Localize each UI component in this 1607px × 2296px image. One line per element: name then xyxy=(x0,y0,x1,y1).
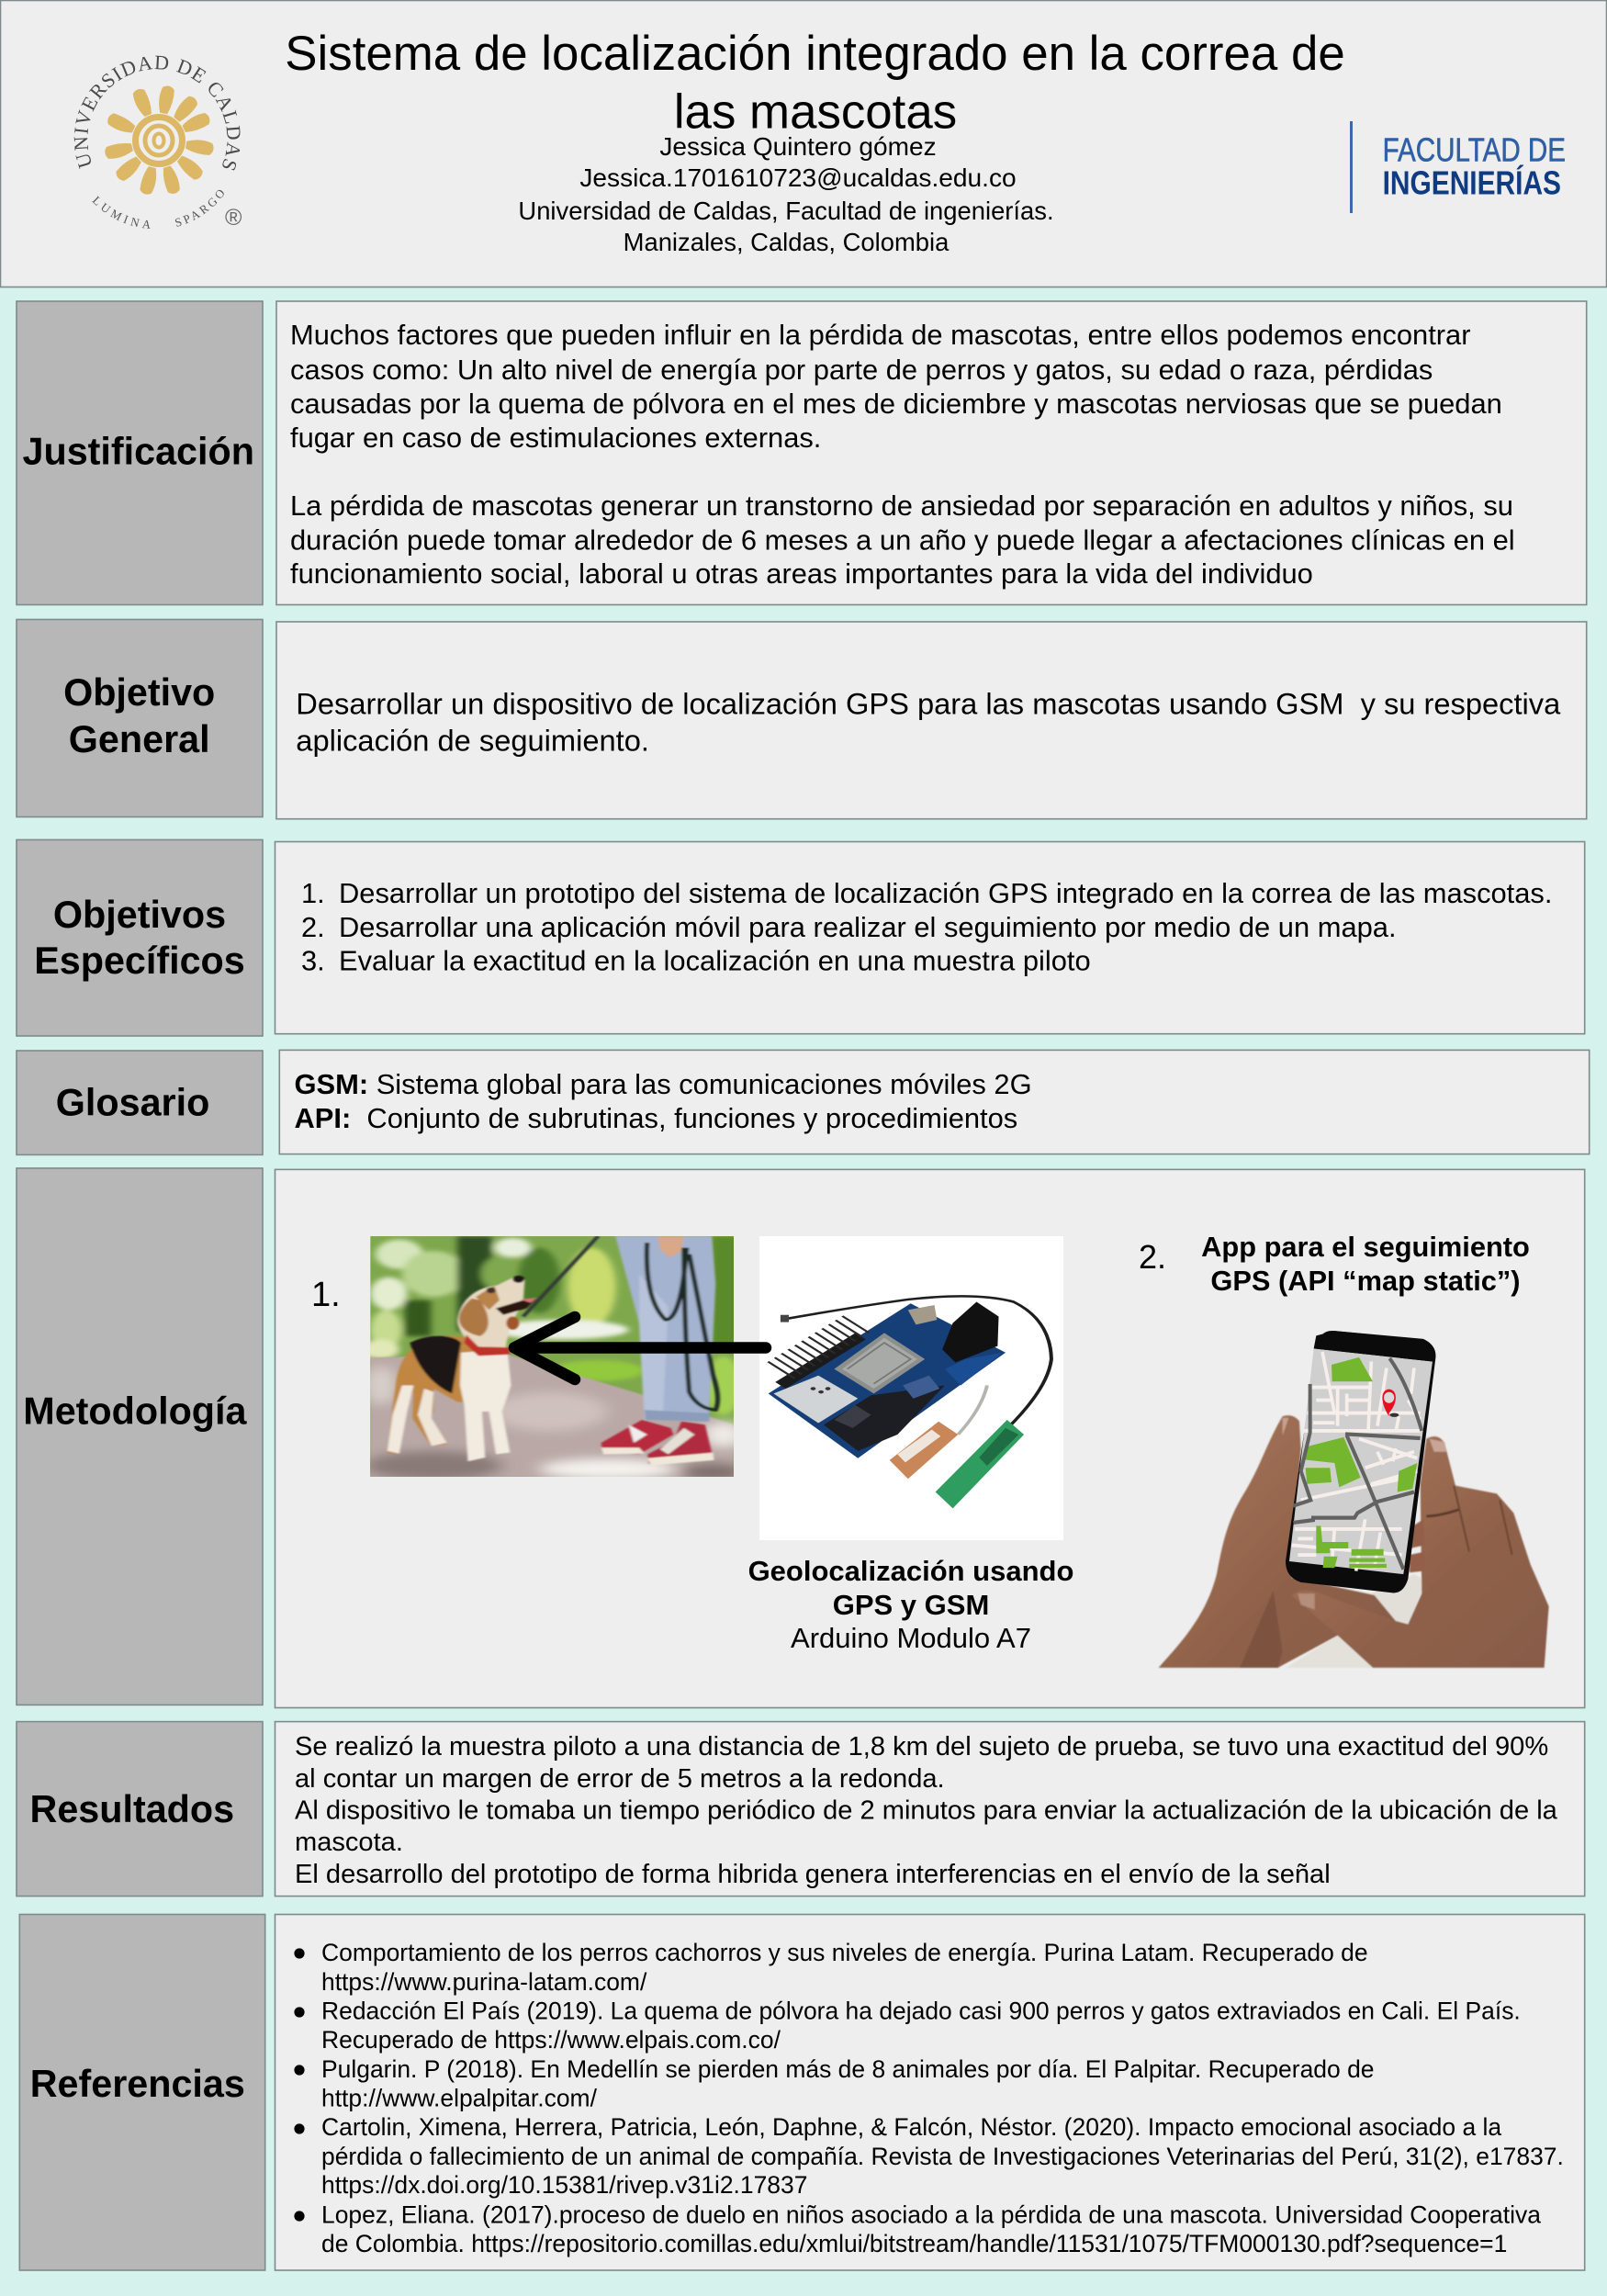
logo: Universidad de Caldas: SPARGO xyxy=(174,189,224,227)
panel: Resultados xyxy=(17,1722,1585,1896)
heading: Objetivos Específicos: Específicos xyxy=(34,940,245,982)
text box: justificación: causadas por la quema de pólvora en el mes de diciembre y mascotas nerviosas que se puedan xyxy=(290,388,1502,420)
author block: Universidad de Caldas, Facultad de ingenierías. xyxy=(518,197,1054,225)
reference list: https://www.purina-latam.com/ xyxy=(321,1968,647,1996)
glossary definitions: GSM: Sistema global para las comunicaciones móviles 2G xyxy=(294,1068,1032,1100)
glossary definitions xyxy=(279,1050,1590,1154)
logo: Facultad de Ingenierías: FACULTAD DE xyxy=(1383,131,1566,169)
list: objetivos específicos: 3. xyxy=(301,945,325,977)
list: objetivos específicos: 1. xyxy=(301,877,325,909)
text box: justificación xyxy=(276,301,1587,604)
step number 1: 1. xyxy=(311,1276,341,1314)
caption: Geolocalización xyxy=(748,1555,1073,1654)
logo: Universidad de Caldas: ® xyxy=(225,205,242,231)
heading: Objetivo General: Objetivo xyxy=(63,671,215,714)
author block xyxy=(518,132,1054,256)
text box: justificación: fugar en caso de estimulaciones externas. xyxy=(290,422,821,454)
heading: Objetivos Específicos: Objetivos xyxy=(53,894,226,936)
title xyxy=(285,27,1345,140)
text box: resultados: El desarrollo del prototipo de forma hibrida genera interferencias en el envío de la señal xyxy=(295,1860,1331,1889)
reference list: Cartolin, Ximena, Herrera, Patricia, León, Daphne, & Falcón, Néstor. (2020). Impacto emocional asociado a la xyxy=(321,2113,1501,2141)
caption: App: GPS (API “map static”) xyxy=(1210,1265,1521,1297)
photo: beagle on leash xyxy=(363,1236,745,1481)
text box: justificación: casos como: Un alto nivel de energía por parte de perros y gatos, su edad o raza, pérdidas xyxy=(290,354,1433,386)
heading: Objetivo General xyxy=(63,671,215,760)
arrow: module to collar xyxy=(514,1317,766,1379)
caption: App: App para el seguimiento xyxy=(1201,1231,1530,1263)
logo: Universidad de Caldas: LUMINA xyxy=(92,196,151,229)
author block: Jessica.1701610723@ucaldas.edu.co xyxy=(579,163,1017,192)
image: hands holding phone with map xyxy=(1159,1331,1549,1668)
list: objetivos específicos: Desarrollar un prototipo del sistema de localización GPS integrado en la correa de las mascotas. xyxy=(339,877,1552,909)
panel: Metodología xyxy=(17,1168,1585,1708)
reference list: Recuperado de https://www.elpais.com.co/ xyxy=(321,2026,781,2054)
heading: Objetivo General: General xyxy=(69,718,210,760)
text box: resultados: Al dispositivo le tomaba un tiempo periódico de 2 minutos para enviar la actualización de la ubicación de la xyxy=(295,1796,1558,1826)
heading: Objetivos Específicos xyxy=(34,894,245,982)
heading: Metodología: Metodología xyxy=(23,1390,247,1433)
author block: Manizales, Caldas, Colombia xyxy=(624,228,950,256)
reference list: Lopez, Eliana. (2017).proceso de duelo en niños asociado a la pérdida de una mascota. Universidad Cooperativa xyxy=(321,2201,1541,2229)
text box: justificación: La pérdida de mascotas generar un transtorno de ansiedad por separación en adultos y niños, su xyxy=(290,490,1513,522)
title: las mascotas xyxy=(674,84,957,140)
heading: Glosario: Glosario xyxy=(56,1082,209,1124)
list: objetivos específicos xyxy=(275,841,1585,1034)
glossary definitions: API: Conjunto de subrutinas, funciones y procedimientos xyxy=(294,1102,1017,1134)
photo: Arduino A7 GPS/GSM module xyxy=(759,1236,1063,1540)
text box: objetivo general: aplicación de seguimiento. xyxy=(296,724,649,757)
reference list xyxy=(275,1914,1585,2270)
header banner xyxy=(0,0,1607,288)
panel: Objetivo General xyxy=(17,619,1587,819)
title: Sistema de localización integrado en la correa de xyxy=(285,27,1345,81)
panel: Glosario xyxy=(17,1050,1590,1154)
author block: Jessica Quintero gómez xyxy=(659,132,937,161)
reference list: de Colombia. https://repositorio.comillas.edu/xmlui/bitstream/handle/11531/1075/TFM000130.pdf?sequence=1 xyxy=(321,2230,1507,2257)
reference list: Comportamiento de los perros cachorros y sus niveles de energía. Purina Latam. Recuperado de xyxy=(321,1939,1368,1966)
heading: Resultados: Resultados xyxy=(29,1788,234,1830)
text box: justificación: Muchos factores que pueden influir en la pérdida de mascotas, entre ellos podemos encontrar xyxy=(290,319,1471,351)
caption: Geolocalización: GPS y GSM xyxy=(833,1589,989,1621)
text box: objetivo general xyxy=(276,622,1587,819)
text box: justificación: funcionamiento social, laboral u otras areas importantes para la vida del individuo xyxy=(290,557,1313,590)
logo: Universidad de Caldas: UNIVERSIDAD DE CALDAS xyxy=(73,55,241,171)
reference list: http://www.elpalpitar.com/ xyxy=(321,2085,598,2112)
text box: objetivo general: Desarrollar un dispositivo de localización GPS para las mascotas usando GSM y su respectiva xyxy=(296,687,1561,721)
text box: resultados: Se realizó la muestra piloto a una distancia de 1,8 km del sujeto de prueba, se tuvo una exactitud del 90% xyxy=(295,1732,1548,1761)
caption: Geolocalización: Arduino Modulo A7 xyxy=(791,1622,1031,1654)
text box: justificación: duración puede tomar alrededor de 6 meses a un año y puede llegar a afectaciones clínicas en el xyxy=(290,523,1515,557)
text box: resultados: mascota. xyxy=(295,1828,403,1857)
logo: Universidad de Caldas xyxy=(73,55,242,231)
reference list: pérdida o fallecimiento de un animal de compañía. Revista de Investigaciones Veterinarias del Perú, 31(2), e17837. xyxy=(321,2143,1564,2170)
caption: App xyxy=(1201,1231,1530,1297)
reference list: https://dx.doi.org/10.15381/rivep.v31i2.17837 xyxy=(321,2171,807,2199)
panel: Objetivos Específicos xyxy=(17,839,1585,1036)
reference list: Pulgarin. P (2018). En Medellín se pierden más de 8 animales por día. El Palpitar. Recuperado de xyxy=(321,2055,1374,2083)
panel: Justificación xyxy=(17,301,1587,604)
text box: resultados: al contar un margen de error de 5 metros a la redonda. xyxy=(295,1764,945,1794)
list: objetivos específicos: Evaluar la exactitud en la localización en una muestra piloto xyxy=(339,945,1091,977)
list: objetivos específicos: Desarrollar una aplicación móvil para realizar el seguimiento por medio de un mapa. xyxy=(339,911,1397,943)
logo: Facultad de Ingenierías xyxy=(1350,121,1566,213)
heading: Justificación: Justificación xyxy=(22,431,254,473)
step number 2: 2. xyxy=(1139,1238,1166,1276)
list: objetivos específicos: 2. xyxy=(301,911,325,943)
heading: Referencias: Referencias xyxy=(30,2063,245,2105)
logo: Facultad de Ingenierías: INGENIERÍAS xyxy=(1383,164,1561,202)
text box: resultados xyxy=(275,1722,1585,1896)
panel: Referencias xyxy=(19,1914,1585,2270)
caption: Geolocalización: Geolocalización usando xyxy=(748,1555,1073,1587)
reference list: Redacción El País (2019). La quema de pólvora ha dejado casi 900 perros y gatos extraviados en Cali. El País. xyxy=(321,1998,1521,2025)
